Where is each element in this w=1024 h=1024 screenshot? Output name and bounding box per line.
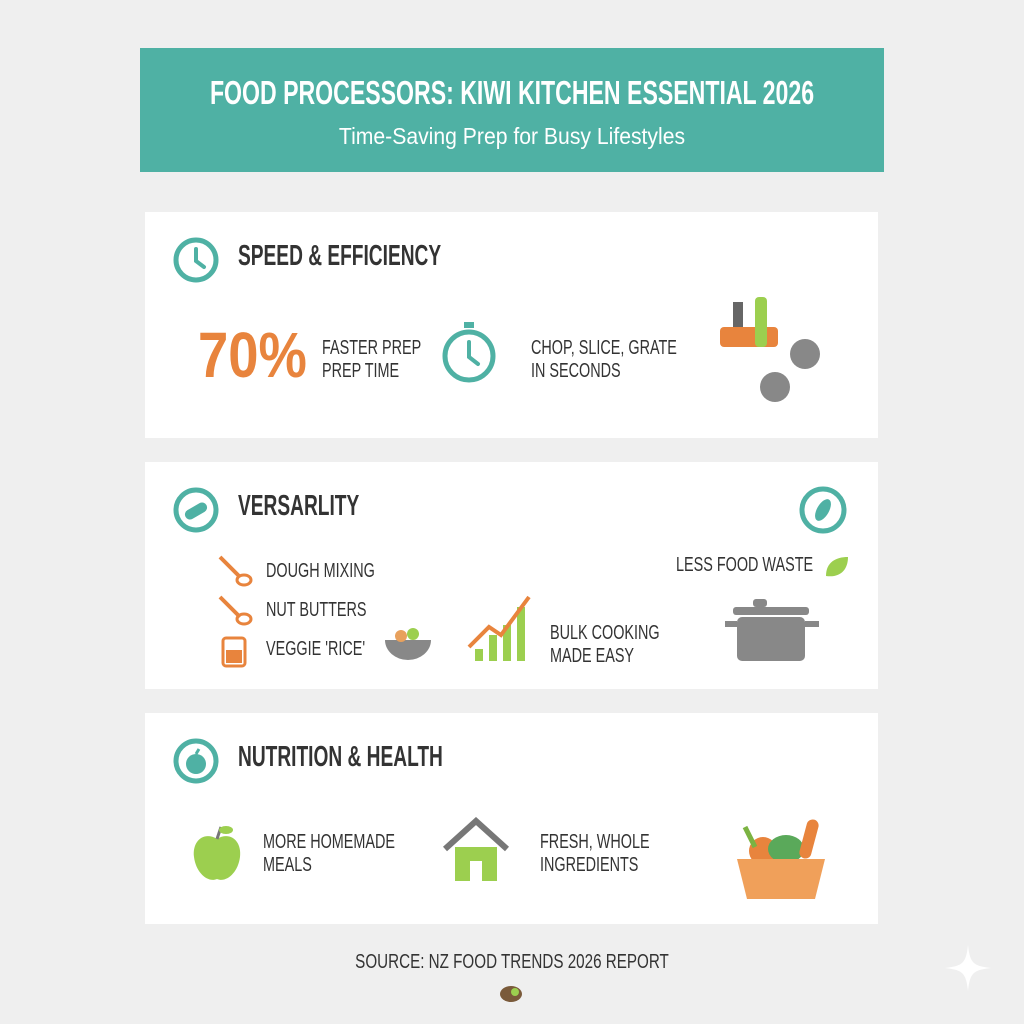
item: dough mixing: DOUGH MIXING [266, 560, 375, 582]
text: fresh whole ingredients [540, 831, 650, 876]
icon: bowl [385, 628, 431, 660]
icon: clock [174, 238, 218, 282]
icon: versatility badge [174, 488, 218, 532]
source text: SOURCE: NZ FOOD TRENDS 2026 REPORT [355, 951, 669, 973]
title: FOOD PROCESSORS: KIWI KITCHEN ESSENTIAL 2026 [210, 74, 814, 111]
text: chop slice grate [531, 337, 677, 382]
panel: nutrition & health [145, 713, 878, 924]
heading: NUTRITION & HEALTH [238, 741, 443, 773]
text: less food waste: LESS FOOD WASTE [676, 554, 813, 576]
text: more homemade meals: MEALS [263, 854, 312, 876]
text: more homemade meals: MORE HOMEMADE [263, 831, 395, 853]
panel: versatility [145, 462, 878, 689]
text: fresh whole ingredients: INGREDIENTS [540, 854, 638, 876]
icon: apple [194, 826, 240, 880]
icon: apple badge [174, 738, 218, 784]
text: bulk cooking: BULK COOKING [550, 622, 660, 644]
panel: speed & efficiency [145, 212, 878, 438]
list: uses [218, 556, 375, 668]
icon: growth chart [468, 596, 531, 661]
heading: VERSARLITY [238, 490, 359, 522]
item: veggie rice: VEGGIE 'RICE' [266, 638, 365, 660]
header banner [140, 48, 884, 172]
sparkle [947, 947, 988, 989]
icon: house [443, 817, 509, 881]
text: faster prep [322, 337, 421, 382]
text: fresh whole ingredients: FRESH, WHOLE [540, 831, 650, 853]
subtitle: Time-Saving Prep for Busy Lifestyles [339, 123, 685, 149]
stat 70%: 70% [198, 319, 307, 391]
icon: stopwatch [442, 322, 496, 382]
item: nut butters: NUT BUTTERS [266, 599, 367, 621]
icon: kiwi [500, 986, 522, 1002]
text: faster prep: PREP TIME [322, 360, 399, 382]
icon: leaf badge [800, 486, 846, 534]
text: chop slice grate: CHOP, SLICE, GRATE [531, 337, 677, 359]
text: faster prep: FASTER PREP [322, 337, 421, 359]
text: chop slice grate: IN SECONDS [531, 360, 621, 382]
text: more homemade meals [263, 831, 395, 876]
icon: leaf [826, 557, 848, 576]
icon: pot [725, 599, 819, 661]
icon: tools and gears [720, 297, 820, 402]
text: bulk cooking: MADE EASY [550, 645, 634, 667]
text: bulk cooking [550, 622, 660, 667]
icon: vegetable basket [737, 820, 825, 899]
heading: SPEED & EFFICIENCY [238, 240, 441, 272]
